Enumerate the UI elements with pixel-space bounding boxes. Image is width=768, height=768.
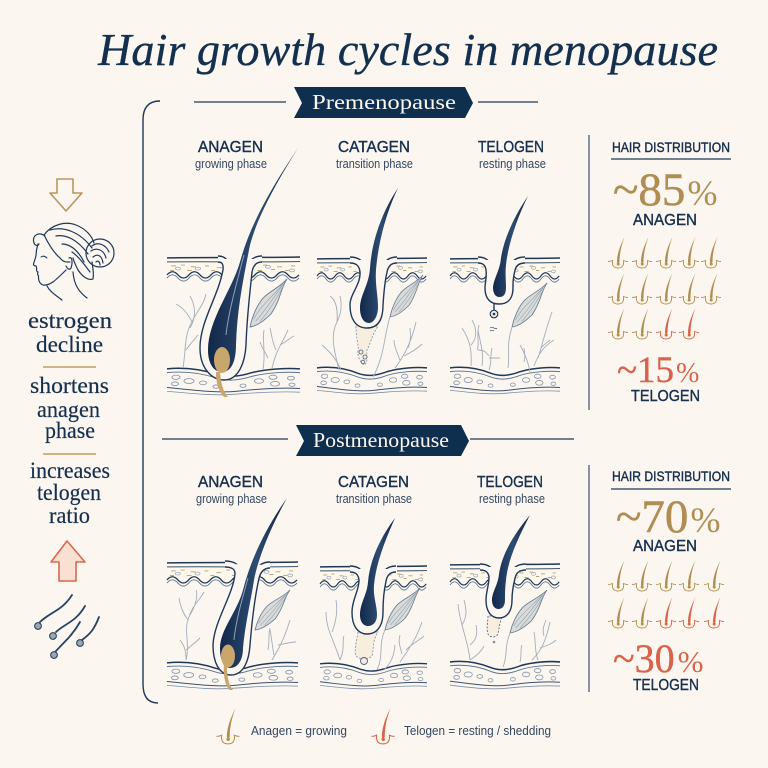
stat: 30 percent telogen: TELOGEN [633,677,699,694]
diagram: premenopause telogen follicle [450,196,560,394]
text: increases telogen ratio: telogen [37,480,101,505]
diagram: postmenopause anagen follicle [167,498,298,690]
divider: postmenopause distribution [588,465,590,692]
hair icon grid [608,237,721,339]
text: increases telogen ratio [30,458,110,528]
column labels: postmenopause: CATAGEN [338,474,409,491]
text: increases telogen ratio: ratio [49,503,90,528]
column labels: postmenopause [196,474,545,506]
column labels: postmenopause: TELOGEN [477,474,543,491]
stat: 85 percent anagen: ANAGEN [633,212,697,229]
stat: 30 percent telogen: ~30% [613,636,703,681]
title: Hair growth cycles in menopause [97,24,718,75]
column labels: premenopause: transition phase [336,157,413,171]
section bracket [143,101,160,703]
hair icon grid [608,560,724,628]
column labels: premenopause: growing phase [195,157,267,171]
heading: Postmenopause: Postmenopause [313,428,449,452]
stat: 70 percent anagen: ~70% [616,491,720,543]
heading: Postmenopause [162,425,574,456]
diagram: premenopause catagen follicle [317,188,427,394]
text: shortens anagen phase: anagen [37,397,100,422]
panel: premenopause hair distribution [608,140,731,405]
column labels: postmenopause: ANAGEN [198,474,263,491]
heading: hair distribution: HAIR DISTRIBUTION [612,140,730,155]
heading: Premenopause: Premenopause [312,90,456,114]
column labels: postmenopause: growing phase [196,492,267,506]
stat: 85 percent anagen: ~85% [613,164,717,216]
panel: postmenopause hair distribution [608,469,731,694]
text: shortens anagen phase [30,373,109,443]
text: shortens anagen phase: shortens [30,373,109,398]
text: shortens anagen phase: phase [45,418,95,443]
icon: telogen hair [371,708,395,744]
legend [216,708,551,744]
divider: premenopause distribution [588,135,590,410]
diagram: postmenopause catagen follicle [320,518,427,689]
column labels: premenopause [195,139,546,171]
heading: Premenopause [194,87,538,118]
stat: 15 percent telogen: TELOGEN [631,388,700,405]
legend text: telogen: Telogen = resting / shedding [404,724,551,738]
stat: 15 percent telogen: ~15% [617,350,699,391]
column labels: postmenopause: transition phase [336,492,412,506]
text: increases telogen ratio: increases [30,458,110,483]
icon: anagen hair [216,708,240,744]
heading: hair distribution: HAIR DISTRIBUTION [612,469,730,484]
diagram: postmenopause telogen follicle [450,515,560,689]
text: estrogen decline: estrogen [28,308,113,333]
legend text: anagen: Anagen = growing [251,724,347,738]
left column: estrogen decline explanation [28,179,114,658]
icon: up arrow [51,541,85,581]
column labels: premenopause: resting phase [479,157,546,171]
column labels: premenopause: CATAGEN [338,139,410,156]
icon: woman profile with hair bun [33,223,114,300]
column labels: premenopause: ANAGEN [198,139,263,156]
stat: 70 percent anagen: ANAGEN [633,538,697,555]
diagram: premenopause anagen follicle [167,148,300,397]
icon: down arrow [50,179,82,211]
text: estrogen decline [28,308,113,357]
column labels: premenopause: TELOGEN [478,139,544,156]
icon: shed hairs [35,595,99,658]
text: estrogen decline: decline [36,332,103,357]
column labels: postmenopause: resting phase [479,492,545,506]
